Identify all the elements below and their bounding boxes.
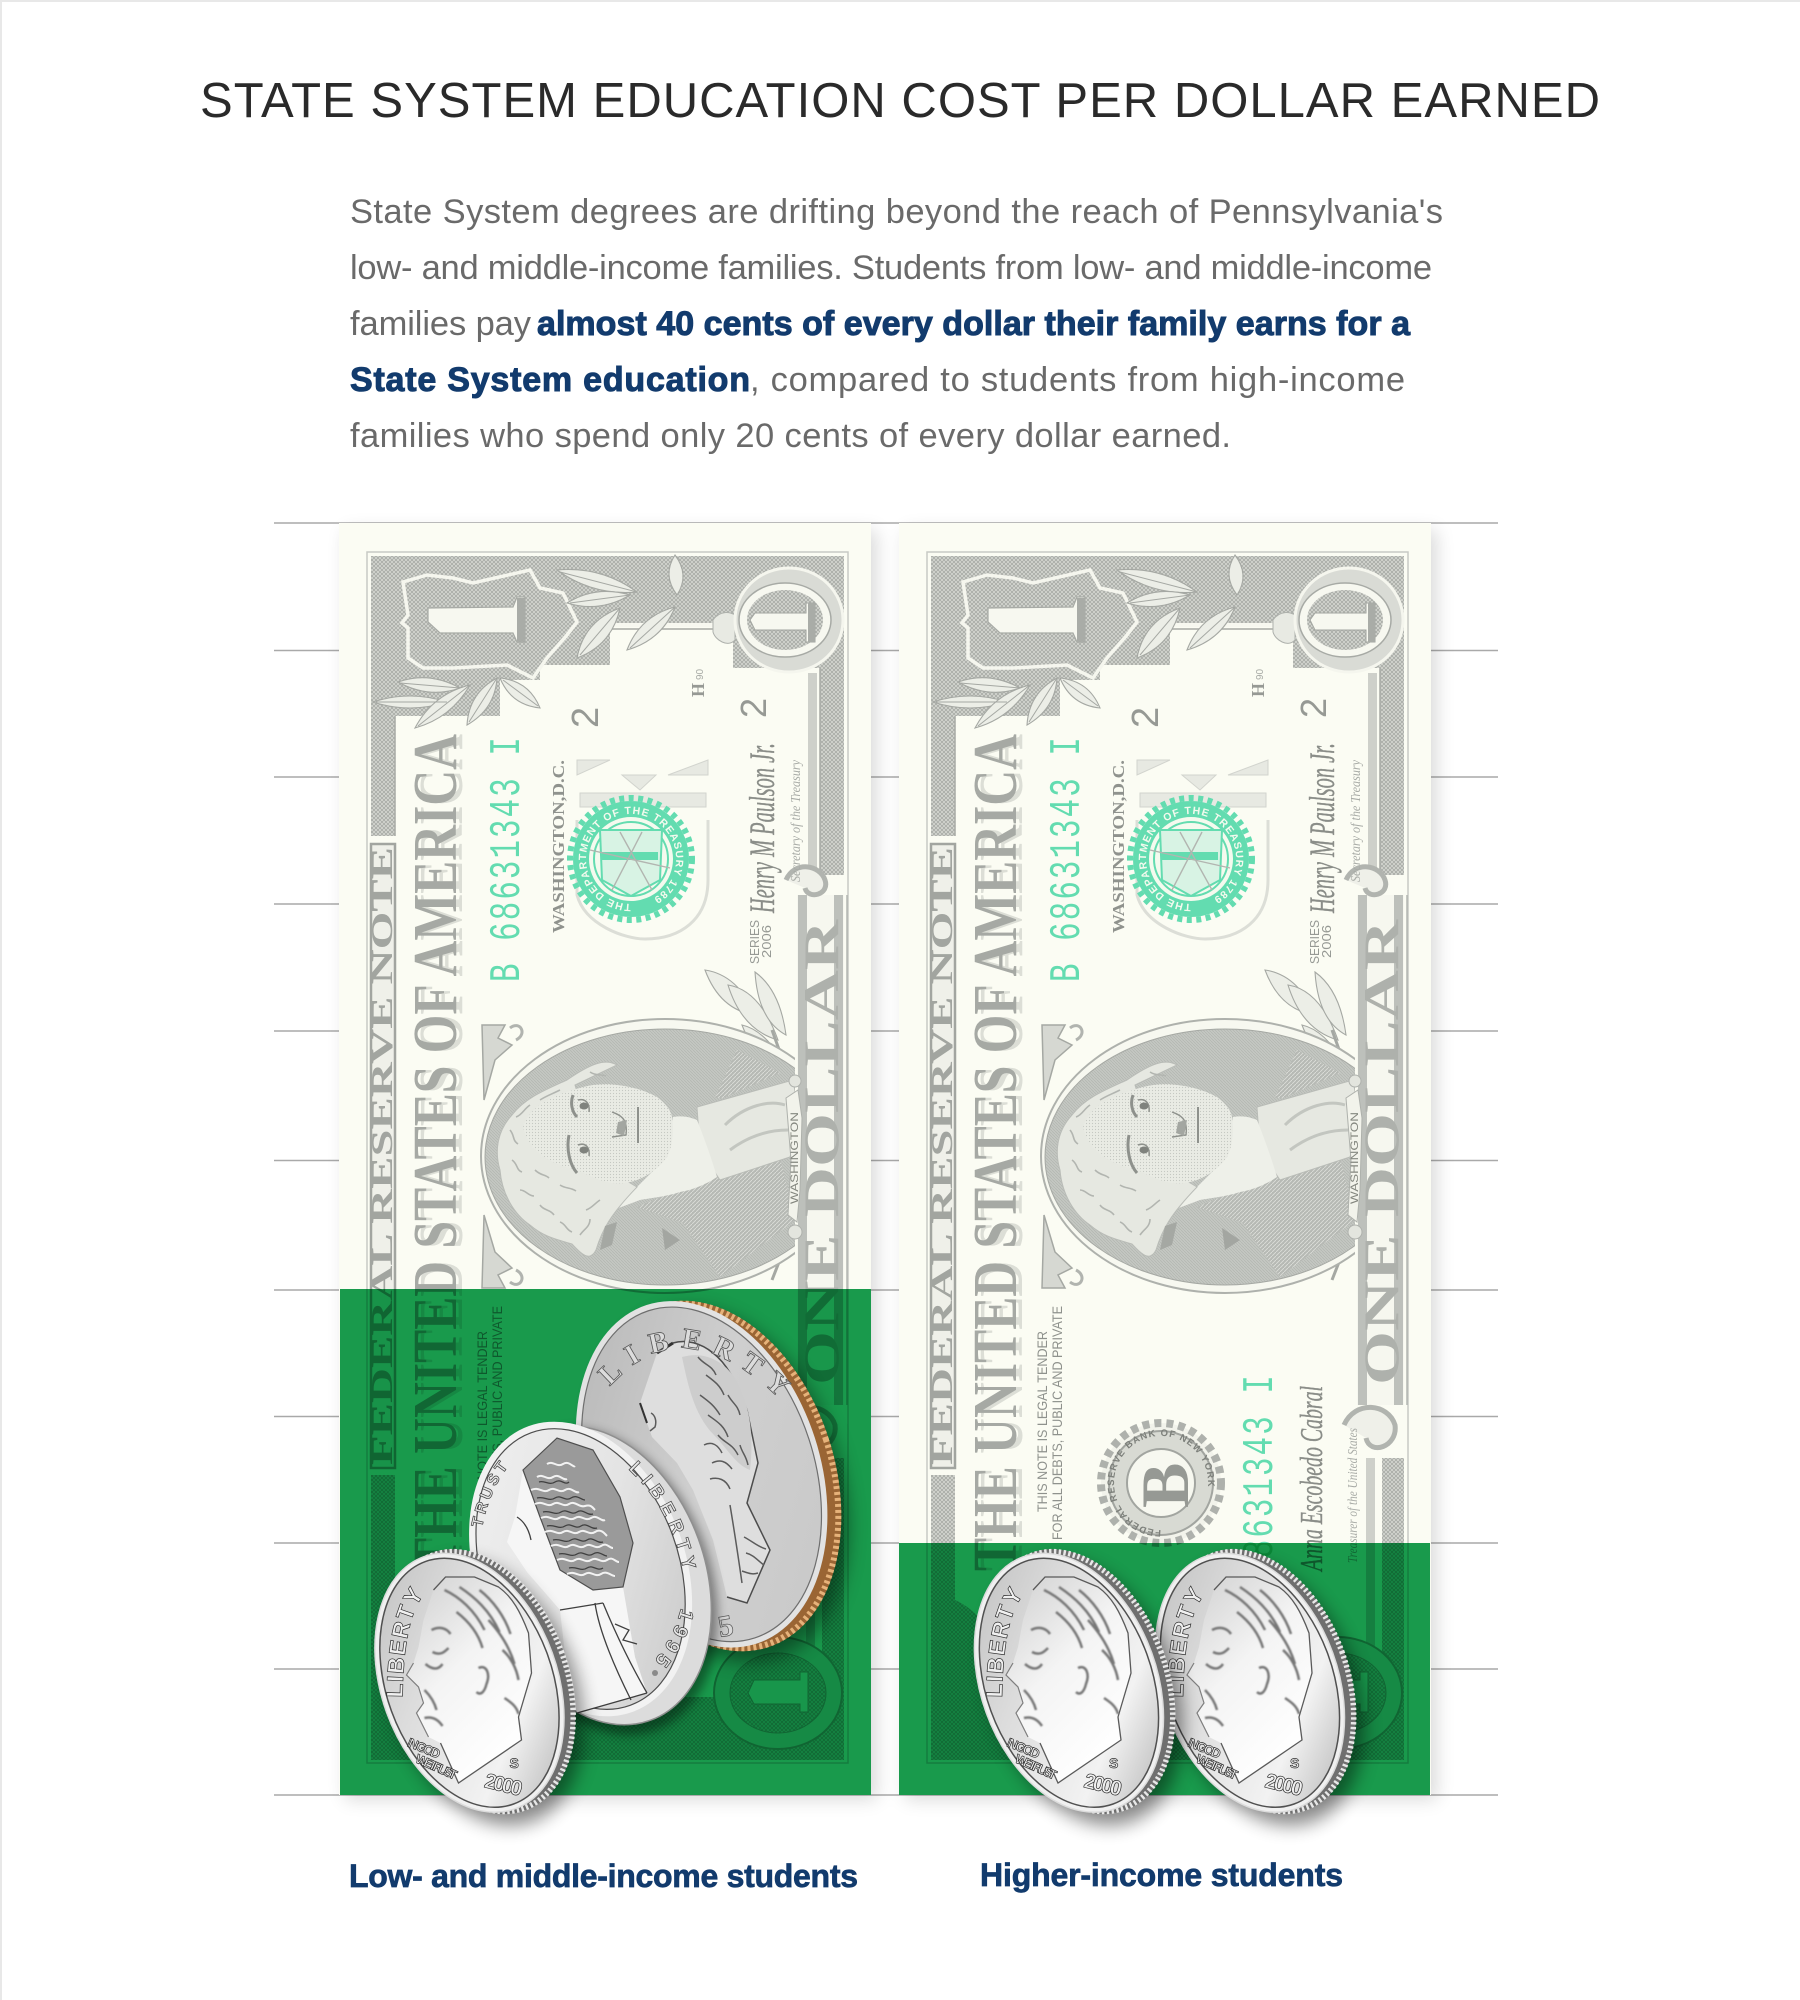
intro paragraph: families who spend only 20 cents of every dollar earned.	[350, 417, 1231, 455]
icon: nickel: TRUST	[470, 1460, 506, 1526]
intro paragraph: State System education	[350, 361, 750, 399]
bill text: 90	[1255, 668, 1266, 680]
bill text: 2006	[759, 925, 774, 958]
bill text: THE UNITED STATES OF AMERICA	[408, 734, 476, 1571]
icon: quarter	[576, 1299, 858, 1671]
label: higher-income students: Higher-income students	[980, 1857, 1343, 1893]
bill text: THE DEPARTMENT OF THE TREASURY 1789	[1138, 806, 1244, 912]
right dollar bill	[899, 523, 1431, 1795]
bill text: 2	[565, 707, 607, 728]
scale grid lines	[274, 523, 1498, 1795]
bill text: THE UNITED STATES OF AMERICA	[962, 734, 1030, 1571]
bill text: Treasurer of the United States	[1346, 1428, 1361, 1563]
bill text: WASHINGTON	[1349, 1112, 1361, 1204]
dime lettering: IN GOD	[1186, 1735, 1223, 1762]
bill text: WASHINGTON,D.C.	[549, 760, 568, 933]
bill text: Henry M Paulson Jr.	[1302, 743, 1342, 914]
bill text: Henry M Paulson Jr.	[742, 743, 782, 914]
icon: first dime, higher-income stack	[974, 1548, 1194, 1838]
bill text: SERIES	[1307, 920, 1322, 964]
green bar: higher-income share	[899, 1543, 1430, 1795]
bill text: Treasurer of the United States	[786, 1428, 801, 1563]
bill text: Anna Escobedo Cabral	[1293, 1386, 1329, 1572]
dime lettering: LIBERTY	[986, 1585, 1021, 1697]
bill text	[364, 668, 849, 1660]
bill text: THE DEPARTMENT OF THE TREASURY 1789	[578, 806, 684, 912]
bill text: B 68631343 I	[1043, 735, 1093, 982]
intro paragraph: almost 40 cents of every dollar their family earns for a	[537, 305, 1411, 343]
bill text: THE UNITED STATES OF AMERICA	[968, 734, 1036, 1571]
bill text: THIS NOTE IS LEGAL TENDER	[474, 1331, 490, 1512]
bill text: 2	[1125, 707, 1167, 728]
bill text: Secretary of the Treasury	[789, 759, 804, 882]
dime lettering: LIBERTY	[386, 1585, 422, 1697]
dime lettering: S	[1290, 1755, 1299, 1771]
intro paragraph: , compared to students from high-income	[750, 361, 1405, 399]
title: STATE SYSTEM EDUCATION COST PER DOLLAR EARNED	[200, 74, 1600, 128]
bill text: FEDERAL RESERVE NOTE	[364, 847, 399, 1465]
bill text: 2006	[1319, 925, 1334, 958]
bill text: Secretary of the Treasury	[1349, 759, 1364, 882]
bill text: B	[567, 1463, 643, 1508]
icon: quarter: LIBERTY	[596, 1328, 792, 1396]
icon: nickel: 1995	[656, 1608, 694, 1668]
dime lettering: S	[510, 1755, 519, 1771]
dime lettering: IN GOD	[405, 1735, 443, 1762]
bill text: B 68631343 I	[483, 735, 533, 982]
dime lettering: LIBERTY	[1168, 1585, 1202, 1697]
bill text: H	[688, 683, 708, 697]
intro paragraph	[350, 193, 1443, 455]
icon: nickel: LIBERTY	[628, 1460, 697, 1568]
intro paragraph: families pay	[350, 305, 532, 343]
dime lettering	[1168, 1585, 1305, 1801]
bill text: ONE DOLLAR	[1353, 919, 1409, 1385]
green bar: low- and middle-income share	[340, 1289, 871, 1795]
bill text: THE UNITED STATES OF AMERICA	[402, 734, 470, 1571]
dime lettering: WE TRUST	[1194, 1751, 1240, 1783]
icon: second dime, higher-income stack	[1156, 1548, 1374, 1838]
icon: dime, low- and middle-income stack	[374, 1548, 595, 1838]
bill text: Anna Escobedo Cabral	[733, 1386, 769, 1572]
bill text: 2	[1293, 698, 1334, 718]
bill shadows	[345, 530, 1437, 1800]
bill text: 90	[695, 668, 706, 680]
dime lettering: IN GOD	[1005, 1735, 1042, 1762]
dime lettering: S	[1109, 1755, 1118, 1771]
bill text: SERIES	[747, 920, 762, 964]
bill text: B 68631343 I	[676, 1373, 726, 1620]
dime lettering: WE TRUST	[1013, 1751, 1059, 1783]
dime lettering	[986, 1585, 1124, 1801]
bill text	[924, 668, 1409, 1660]
bill text: B	[1127, 1463, 1203, 1508]
dime lettering: WE TRUST	[413, 1751, 460, 1783]
bill text: H	[1248, 683, 1268, 697]
label: low- and middle-income students: Low- and middle-income students	[349, 1858, 858, 1894]
bill text: B 68631343 I	[1236, 1373, 1286, 1620]
bill text: 2	[733, 698, 774, 718]
intro paragraph: State System degrees are drifting beyond the reach of Pennsylvania's	[350, 193, 1443, 231]
bill text: ONE DOLLAR	[793, 919, 849, 1385]
bill text: WASHINGTON	[789, 1112, 801, 1204]
bill text: FEDERAL RESERVE BANK OF NEW YORK	[1107, 1429, 1215, 1537]
left dollar bill	[339, 523, 871, 1795]
bill text: FEDERAL RESERVE NOTE	[924, 847, 959, 1465]
bill text: FOR ALL DEBTS, PUBLIC AND PRIVATE	[489, 1306, 505, 1540]
dime lettering	[386, 1585, 525, 1801]
dime lettering: 2000	[1263, 1770, 1305, 1801]
intro paragraph: low- and middle-income families. Students from low- and middle-income	[350, 249, 1432, 287]
bill text: WASHINGTON,D.C.	[1109, 760, 1128, 933]
bill text: FEDERAL RESERVE BANK OF NEW YORK	[546, 1428, 656, 1538]
bill text: THIS NOTE IS LEGAL TENDER	[1034, 1331, 1050, 1512]
dime lettering: 2000	[1082, 1770, 1124, 1801]
icon: quarter: 5	[715, 1609, 736, 1644]
bill text: FOR ALL DEBTS, PUBLIC AND PRIVATE	[1049, 1306, 1065, 1540]
dime lettering: 2000	[482, 1770, 525, 1801]
icon: nickel	[469, 1422, 724, 1740]
